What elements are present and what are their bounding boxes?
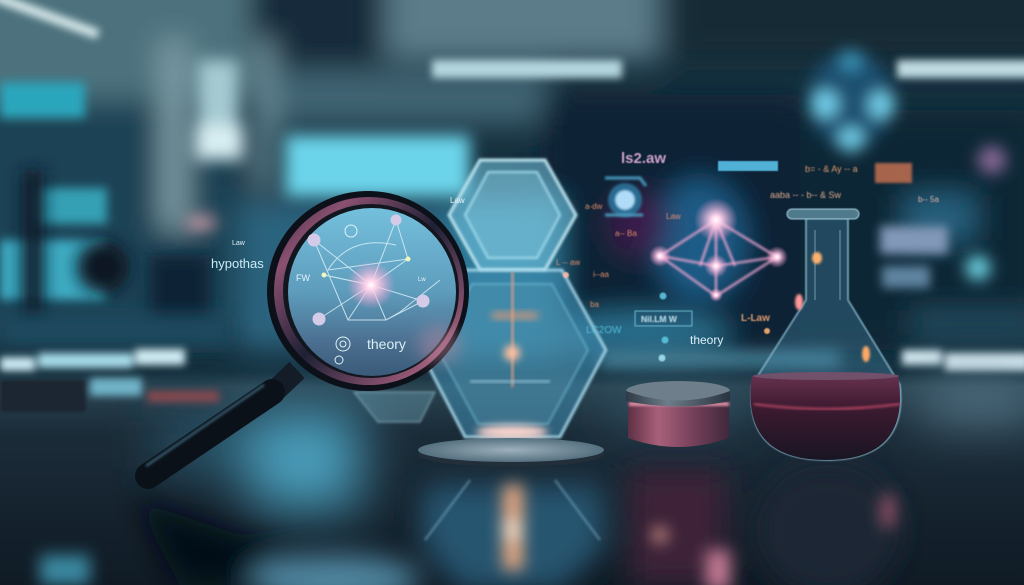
- floating holographic labels: b= - & Ay -- a: [805, 164, 858, 174]
- floating holographic labels: Nil.LM W: [641, 314, 678, 324]
- glass disc base: [418, 438, 604, 467]
- floating holographic labels: b-- 5a: [918, 195, 939, 204]
- floating holographic labels: LC2OW: [586, 325, 622, 336]
- handle: [146, 370, 297, 476]
- frame: [267, 191, 469, 391]
- lens label: theory: theory: [367, 336, 406, 352]
- lens: [288, 208, 456, 376]
- label: top formula: ls2.aw: [621, 150, 666, 167]
- lens label: small: Lw: [418, 277, 426, 283]
- label: hypothesis: hypothas: [211, 256, 264, 271]
- floating holographic labels: a-- Ba: [615, 229, 637, 238]
- floating holographic labels: L-Law: [741, 313, 770, 324]
- lower glass hexagon: [420, 270, 606, 439]
- holographic network: pink molecule: [605, 178, 788, 302]
- network in lens: [314, 220, 440, 320]
- label: small law left: Law: [232, 240, 246, 247]
- blurred lab background: [0, 0, 1024, 390]
- small rear glass hexagon: [354, 392, 435, 422]
- upper glass hexagon: [449, 160, 576, 270]
- table reflections: [135, 464, 900, 585]
- label: theory (right): theory: [690, 333, 723, 347]
- Erlenmeyer flask: [751, 209, 901, 460]
- pink metal cylinder: [626, 381, 730, 447]
- floating holographic labels: L -- aw: [556, 258, 580, 267]
- lens label: law: FW: [296, 273, 310, 283]
- floating holographic labels: i--aa: [593, 270, 610, 279]
- floating holographic labels: a-dw: [585, 202, 603, 211]
- floating holographic labels: aaba -- - b-- & Sw: [770, 190, 842, 200]
- floating holographic labels: ba: [590, 300, 599, 309]
- label: law top: Law: [450, 196, 465, 205]
- floating holographic labels: Law: [666, 212, 681, 221]
- floating holographic labels: [556, 150, 939, 362]
- magnifying glass: [146, 191, 469, 476]
- table surface: [0, 372, 1024, 585]
